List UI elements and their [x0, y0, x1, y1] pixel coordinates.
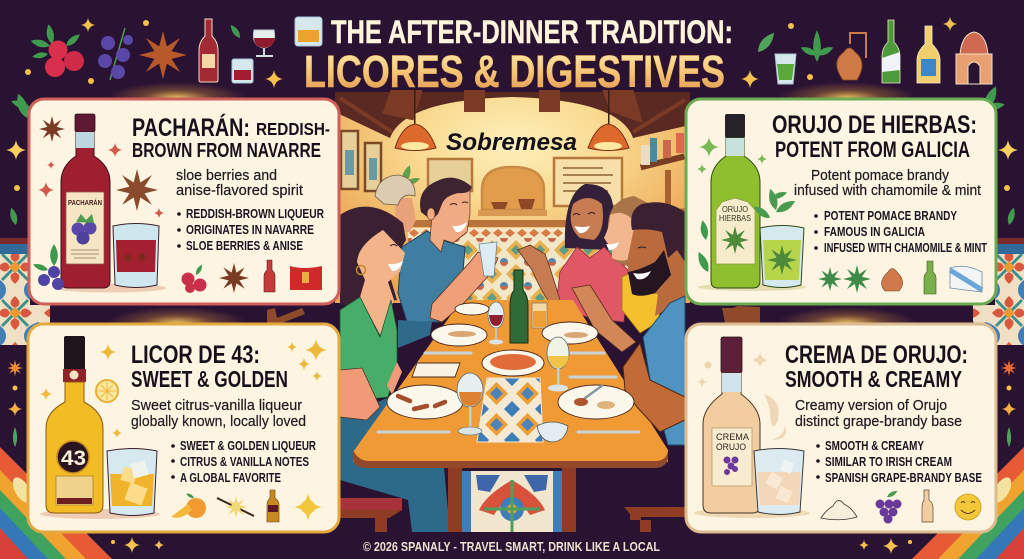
icon: copper still [837, 33, 866, 80]
panel: crema de orujo [686, 324, 996, 532]
panel: pacharan [29, 99, 339, 304]
sparkles crema [697, 352, 768, 387]
colorful corner bottom right [912, 447, 1024, 559]
icon: whisky glass [295, 17, 322, 46]
tile band right [973, 238, 1024, 345]
text: licor 43 description: Sweet citrus-vanilla liqueur [131, 398, 302, 414]
list: crema facts: SPANISH GRAPE-BRANDY BASE [825, 471, 982, 485]
small bowl [537, 422, 568, 442]
footer: © 2026 SPANALY - TRAVEL SMART, DRINK LIKE A LOCAL [363, 540, 660, 554]
lamp left [395, 90, 436, 150]
heading: orujo: POTENT FROM GALICIA [775, 137, 970, 162]
plant [400, 164, 421, 187]
side decorations right [981, 85, 1018, 447]
heading: crema: CREMA DE ORUJO: [785, 341, 968, 369]
amber wine glass [457, 373, 483, 435]
header icons left [25, 17, 322, 88]
woman in pink shirt [518, 184, 628, 322]
ceiling [335, 92, 690, 138]
text: pacharan description: sloe berries and [176, 168, 277, 184]
bearded man body [623, 296, 685, 445]
left diner legs [340, 395, 450, 532]
icon: bottle licor 43: 43 [61, 447, 86, 470]
tile wainscot [408, 220, 633, 304]
cutlery [378, 353, 639, 432]
list: crema facts: SIMILAR TO IRISH CREAM [825, 455, 952, 469]
icon: cream swirl [764, 394, 786, 440]
icon: leaf [229, 23, 242, 40]
icon: shot glass [775, 54, 796, 84]
heading: pacharan: BROWN FROM NAVARRE [132, 139, 321, 162]
icon: bottle licor 43 [46, 336, 103, 513]
list: crema facts: SMOOTH & CREAMY [825, 439, 925, 453]
white wine glass [547, 337, 569, 392]
icon: star anise [139, 31, 187, 79]
icon: bottle orujo: ORUJO [722, 205, 748, 214]
panel glows [107, 82, 917, 339]
icon: green bottle [882, 20, 900, 83]
woman in green shirt [340, 207, 406, 420]
text: crema description: distinct grape-brandy base [795, 414, 962, 430]
title [304, 14, 733, 97]
food [490, 354, 536, 370]
icon: herb left [695, 220, 711, 274]
wall pictures [341, 131, 622, 206]
chair left [267, 308, 305, 323]
heading: crema [785, 341, 968, 392]
text: licor 43 description: globally known, locally loved [131, 414, 306, 430]
icon: lemon slice [96, 380, 118, 402]
text: pacharan description: anise-flavored spirit [176, 183, 303, 199]
icon: wine bottle [199, 19, 218, 82]
list: pacharan facts: ORIGINATES IN NAVARRE [186, 223, 314, 237]
tile band left [0, 238, 50, 345]
list: crema facts [816, 439, 982, 485]
sparkles and dots [25, 18, 283, 88]
heading: licor 43: SWEET & GOLDEN [131, 366, 288, 392]
panel: licor 43 [28, 324, 339, 532]
icon: glass crema [754, 448, 804, 514]
plates [387, 303, 634, 419]
sign lines [563, 168, 613, 191]
wine glass red [488, 302, 504, 344]
title line 2: LICORES & DIGESTIVES [304, 46, 725, 97]
older man in background [375, 175, 416, 232]
text: pacharan description [176, 168, 303, 199]
icon: bottle crema: ORUJO [716, 442, 746, 452]
shelf [640, 133, 685, 220]
heading: pacharan: PACHARÁN: [132, 113, 250, 142]
sparkles and dots [741, 17, 957, 88]
heading: Sobremesa: Sobremesa [446, 129, 577, 156]
icon: glass pacharan [113, 224, 159, 288]
center tile runner [477, 378, 543, 442]
wall [335, 92, 690, 304]
bottom sparkles left [111, 537, 164, 553]
heading: orujo [772, 111, 977, 162]
list: licor 43 facts: A GLOBAL FAVORITE [180, 471, 281, 485]
icon: bottle orujo [711, 114, 760, 288]
icon: glass orujo [760, 226, 804, 288]
icon: glass licor 43 [107, 448, 157, 516]
stool right [624, 507, 685, 532]
list: licor 43 facts: CITRUS & VANILLA NOTES [180, 455, 309, 469]
icon row: pacharan [182, 260, 322, 293]
picture details [345, 150, 377, 180]
man in blue shirt [398, 178, 472, 322]
juice glass [532, 303, 547, 328]
bottom sparkles right [859, 538, 912, 554]
list: licor 43 facts [171, 439, 316, 485]
icon: bottle crema [703, 337, 760, 513]
heading: licor 43: LICOR DE 43: [131, 341, 260, 369]
table [353, 300, 668, 532]
list: orujo facts: FAMOUS IN GALICIA [824, 225, 925, 239]
icon: mint leaf [755, 30, 777, 55]
icon: cranberries [30, 24, 84, 77]
icon: blueberries [32, 244, 64, 290]
bearded man head [627, 202, 685, 316]
icon: bottle crema: CREMA [716, 432, 749, 442]
text: crema description: Creamy version of Orujo [795, 398, 947, 414]
text: orujo description [794, 168, 981, 199]
icon row: orujo [818, 261, 982, 294]
list: pacharan facts: SLOE BERRIES & ANISE [186, 239, 303, 253]
seat shadows [398, 320, 432, 348]
shadow under table [335, 303, 690, 532]
icon: wine glass [253, 30, 275, 57]
heading: pacharan [132, 113, 330, 162]
icon row: crema [821, 489, 981, 524]
icon: bottle pacharan: PACHARÁN [68, 198, 102, 207]
icons: anise and sparkles [38, 116, 164, 218]
icon: bottle orujo: HIERBAS [719, 214, 751, 223]
icon: church [956, 32, 992, 84]
panel: orujo de hierbas [686, 99, 996, 304]
sparkles licor 43 [40, 339, 327, 438]
woman with light brown hair [572, 196, 662, 352]
list: pacharan facts: REDDISH-BROWN LIQUEUR [186, 207, 324, 221]
napkin [412, 363, 460, 377]
title line 1: THE AFTER-DINNER TRADITION: [331, 14, 733, 50]
text: orujo description: infused with chamomile & mint [794, 183, 981, 199]
text: crema description [795, 398, 962, 430]
heading: crema: SMOOTH & CREAMY [785, 366, 962, 392]
wine bottle [510, 270, 528, 343]
icon row: licor 43 [171, 490, 322, 522]
list: pacharan facts [177, 207, 324, 253]
stool left [340, 498, 402, 532]
text: licor 43 description [131, 398, 306, 430]
icon: sloe berries [98, 28, 133, 80]
icon: yellow bottle [917, 26, 940, 83]
place settings [378, 270, 639, 442]
list: licor 43 facts: SWEET & GOLDEN LIQUEUR [180, 439, 316, 453]
list: orujo facts [814, 209, 987, 255]
icon: tumbler [232, 59, 253, 83]
heading: pacharan: REDDISH- [256, 119, 330, 139]
man arm and glass [430, 242, 498, 322]
chair right [722, 306, 760, 323]
colorful corner bottom left [0, 447, 112, 559]
heading: licor 43 [131, 341, 288, 392]
tile under table [462, 471, 562, 532]
wall niche [478, 167, 547, 216]
heading: orujo: ORUJO DE HIERBAS: [772, 111, 977, 139]
side decorations left [6, 92, 31, 447]
sparkles orujo [697, 137, 767, 174]
list: orujo facts: POTENT POMACE BRANDY [824, 209, 958, 223]
icon: herb sprig [799, 30, 835, 62]
text: orujo description: Potent pomace brandy [811, 168, 950, 184]
central tavern scene [335, 90, 690, 532]
icon: bottle pacharan [61, 114, 110, 288]
header icons right [741, 17, 992, 88]
lamp right [588, 90, 629, 150]
icon: herb sprig [752, 188, 797, 221]
